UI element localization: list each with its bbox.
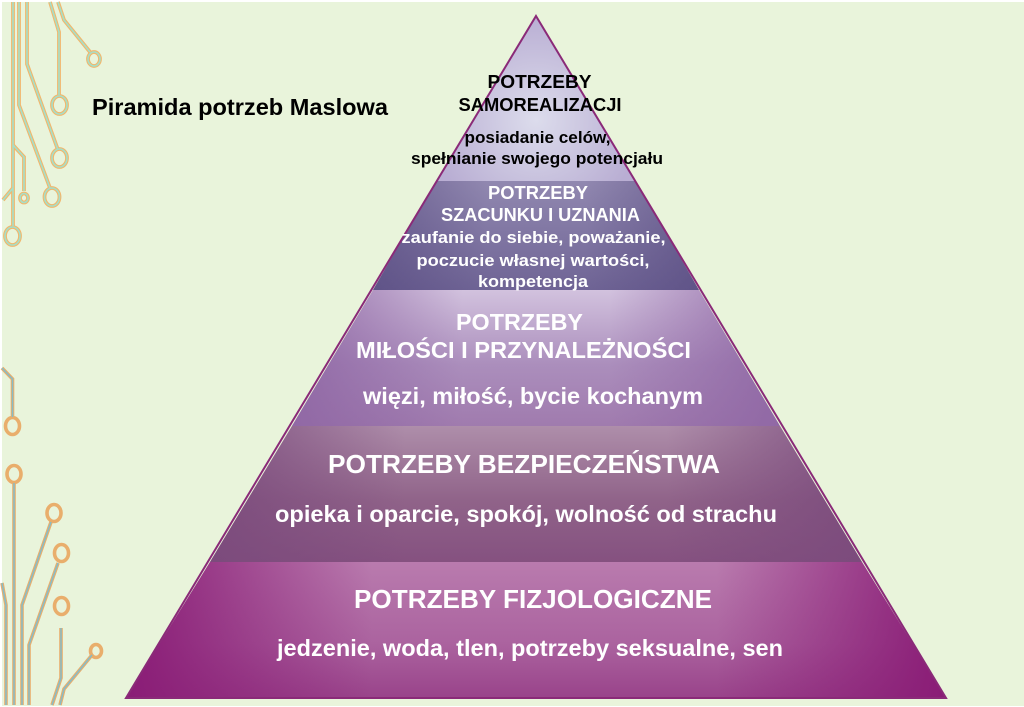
- pyramid outline: [126, 16, 946, 698]
- text: physiological: [276, 584, 783, 661]
- text: self-actualization: posiadanie celów,: [464, 128, 610, 147]
- text: love: MIŁOŚCI I PRZYNALEŻNOŚCI: [356, 336, 691, 363]
- level 5: self-actualization: [436, 15, 636, 181]
- text: esteem: kompetencja: [478, 272, 589, 291]
- level 4: esteem: [373, 181, 699, 290]
- text: self-actualization: SAMOREALIZACJI: [458, 95, 622, 115]
- text: physiological: POTRZEBY FIZJOLOGICZNE: [354, 584, 712, 614]
- text: safety: [275, 449, 777, 527]
- text: self-actualization: POTRZEBY: [488, 72, 592, 92]
- pyramid: [126, 15, 946, 698]
- level 1: physiological: [126, 562, 946, 698]
- text: safety: opieka i oparcie, spokój, wolność od strachu: [275, 501, 777, 527]
- title: Piramida potrzeb Maslowa: [92, 94, 388, 120]
- text: esteem: poczucie własnej wartości,: [416, 251, 650, 270]
- text: esteem: zaufanie do siebie, poważanie,: [402, 228, 666, 247]
- text: self-actualization: [411, 72, 663, 168]
- text: love: [356, 309, 703, 409]
- text: love: więzi, miłość, bycie kochanym: [362, 383, 703, 409]
- text: love: POTRZEBY: [456, 309, 583, 335]
- decoration: upper circuit lines: [3, 2, 100, 245]
- decoration: lower circuit lines: [2, 368, 102, 705]
- text: self-actualization: spełnianie swojego potencjału: [411, 149, 663, 168]
- level 3: love: [292, 290, 780, 426]
- text: esteem: SZACUNKU I UZNANIA: [441, 205, 640, 225]
- text: physiological: jedzenie, woda, tlen, potrzeby seksualne, sen: [276, 635, 783, 661]
- level 2: safety: [210, 426, 862, 562]
- text: esteem: [402, 183, 666, 291]
- text: safety: POTRZEBY BEZPIECZEŃSTWA: [328, 449, 720, 479]
- text: esteem: POTRZEBY: [488, 183, 588, 203]
